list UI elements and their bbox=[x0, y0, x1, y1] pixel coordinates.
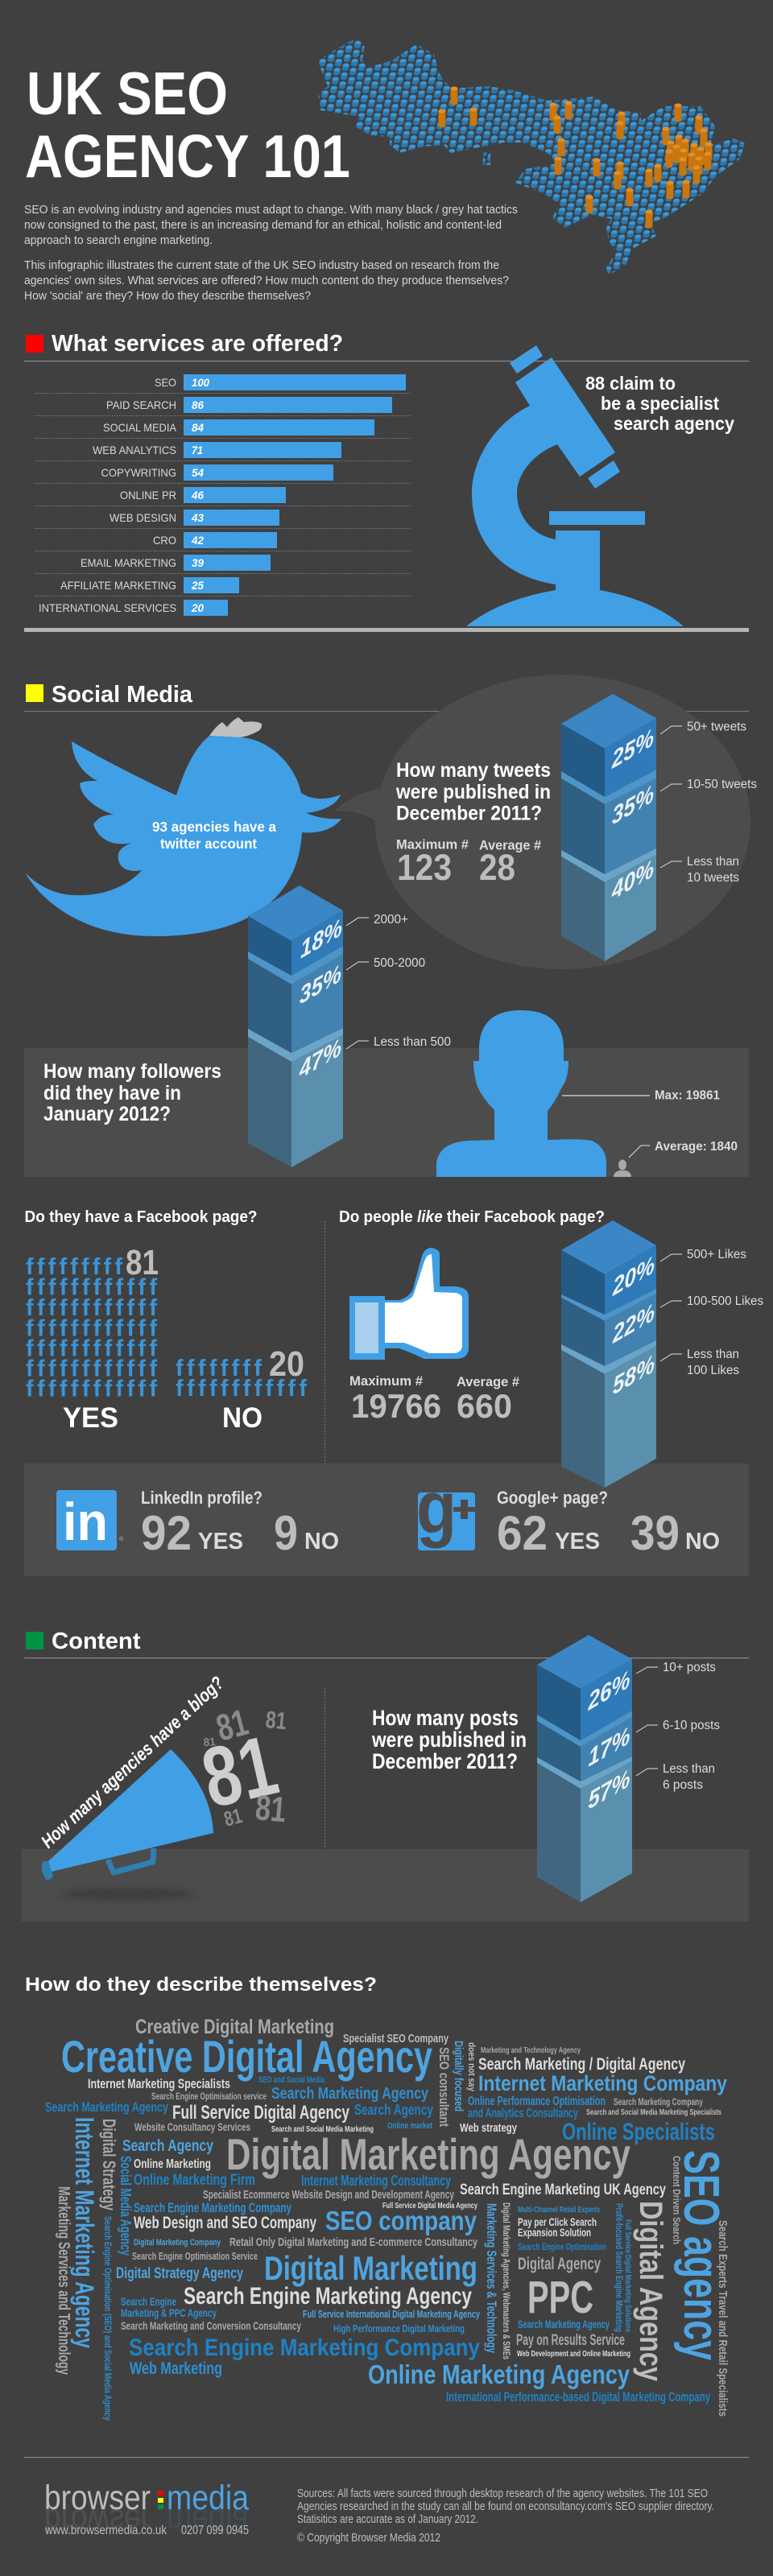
bar chart: services: 25 bbox=[191, 580, 204, 592]
word cloud: Search Marketing Agency bbox=[518, 2318, 610, 2330]
callout: 88 specialist: be a specialist bbox=[601, 393, 719, 414]
stat: linkedin profile: YES bbox=[198, 1529, 243, 1554]
word cloud: Search and Social Media Marketing bbox=[271, 2124, 374, 2134]
word cloud: Web Marketing bbox=[130, 2359, 222, 2378]
stat: linkedin profile: NO bbox=[304, 1529, 339, 1554]
word cloud: Search Engine bbox=[121, 2295, 176, 2308]
pictogram: no 20: NO bbox=[222, 1402, 262, 1434]
bar chart: services: INTERNATIONAL SERVICES bbox=[39, 601, 176, 614]
word cloud: SEO and Social Media bbox=[258, 2075, 325, 2085]
title bbox=[25, 60, 350, 190]
stats: tweets max and average bbox=[396, 837, 542, 888]
stats: likes max and average: Maximum # bbox=[349, 1373, 424, 1389]
word cloud: Digital Marketing Agency bbox=[226, 2129, 630, 2179]
sources bbox=[297, 2487, 714, 2545]
word cloud: Search Engine Optimisation (SEO) and Social Media Agency bbox=[102, 2216, 114, 2421]
icon: google plus: g bbox=[416, 1467, 457, 1549]
stacked column: posts: 57% bbox=[588, 1764, 630, 1814]
stacked column: posts: 17% bbox=[588, 1721, 630, 1772]
stats: likes max and average: 660 bbox=[457, 1387, 512, 1425]
word cloud: Search Engine Marketing Company bbox=[129, 2334, 480, 2361]
pictogram: yes 81: ffffffffffff bbox=[26, 1295, 157, 1321]
word cloud: SEO company bbox=[325, 2206, 477, 2235]
pictogram: no 20: 20 bbox=[269, 1344, 304, 1384]
word cloud: Digital Strategy Agency bbox=[116, 2265, 243, 2282]
sources: © Copyright Browser Media 2012 bbox=[297, 2532, 440, 2545]
question: tweets bbox=[395, 759, 551, 824]
word cloud: Content Driven Search bbox=[671, 2156, 683, 2244]
pictogram: no 20: ffffffffffff bbox=[176, 1376, 307, 1402]
word cloud: Pay per Click Search bbox=[518, 2215, 597, 2228]
word cloud: Online market bbox=[387, 2121, 432, 2131]
bar chart: services: EMAIL MARKETING bbox=[81, 556, 176, 569]
word cloud: Search Marketing Company bbox=[614, 2096, 703, 2107]
icon: linkedin: ® bbox=[119, 1536, 124, 1542]
stacked column: followers: 18% bbox=[300, 913, 342, 964]
logo: browser media: browser bbox=[44, 2479, 151, 2517]
pictogram: yes 81: fffffffff bbox=[26, 1254, 122, 1280]
stacked column: tweets: 25% bbox=[611, 723, 654, 774]
word cloud: Multi-Channel Retail Experts bbox=[518, 2206, 600, 2215]
word cloud: does not say bbox=[466, 2042, 477, 2091]
word cloud: Marketing and Technology Agency bbox=[481, 2046, 581, 2055]
icon: thumbs up bbox=[349, 1248, 469, 1360]
bar chart: services: SOCIAL MEDIA bbox=[103, 421, 177, 434]
stat: google plus page: 62 bbox=[497, 1506, 548, 1560]
labels: tweets column: 50+ tweets bbox=[687, 720, 746, 734]
green square marker bbox=[26, 1632, 43, 1649]
word cloud: Web Design and SEO Company bbox=[134, 2214, 316, 2232]
labels: posts column: Less than bbox=[663, 1762, 715, 1776]
labels: likes column: 500+ Likes bbox=[687, 1248, 746, 1261]
bar chart: services: AFFILIATE MARKETING bbox=[60, 579, 176, 592]
stat: google plus page: NO bbox=[685, 1529, 720, 1554]
labels: followers column bbox=[346, 913, 451, 1049]
icon: large head silhouette bbox=[436, 1010, 606, 1177]
word cloud: Full Service Digital Media Agency bbox=[382, 2201, 477, 2211]
word cloud: Creative Digital Agency bbox=[61, 2031, 432, 2082]
word cloud: SEO agency bbox=[673, 2150, 729, 2360]
contact details: www.browsermedia.co.uk bbox=[44, 2524, 167, 2537]
word cloud: Expansion Solution bbox=[518, 2226, 591, 2239]
bar chart: services: 100 bbox=[192, 377, 209, 389]
section: facebook bbox=[24, 1208, 763, 1576]
word cloud: Online Marketing Firm bbox=[134, 2172, 255, 2189]
word cloud: Search Agency bbox=[354, 2102, 433, 2118]
heading: facebook likes: Do people like their Facebook page? bbox=[339, 1208, 605, 1226]
word cloud: Search Engine Optimisation bbox=[518, 2241, 606, 2252]
word cloud: Marketing Services & Technology bbox=[484, 2203, 499, 2353]
title: UK SEO bbox=[27, 60, 228, 127]
heading: how do they describe themselves: How do they describe themselves? bbox=[25, 1974, 377, 1996]
stat: 81 blogs: 81 bbox=[194, 1718, 286, 1826]
question: tweets: How many tweets bbox=[396, 759, 551, 782]
intro text bbox=[24, 204, 518, 303]
question: followers: January 2012? bbox=[43, 1103, 171, 1125]
word cloud: Search Marketing and Conversion Consultancy bbox=[121, 2319, 301, 2332]
word cloud: Internet Marketing Company bbox=[478, 2071, 727, 2095]
pictogram: yes 81: YES bbox=[63, 1402, 118, 1434]
labels: posts column bbox=[636, 1661, 720, 1792]
speech bubble bbox=[335, 675, 750, 969]
question: tweets: were published in bbox=[395, 781, 551, 803]
word cloud: Search Engine Marketing UK Agency bbox=[460, 2182, 666, 2198]
section: social media bbox=[24, 675, 757, 1177]
labels: posts column: 6-10 posts bbox=[663, 1719, 720, 1732]
pictogram: yes 81: 81 bbox=[126, 1243, 159, 1282]
section: content bbox=[22, 1629, 749, 1922]
bar chart: services: 42 bbox=[191, 535, 204, 547]
social profiles panel bbox=[24, 1463, 749, 1576]
labels: tweets column: 10 tweets bbox=[687, 871, 739, 885]
word cloud: Digital Marketing Company bbox=[134, 2238, 221, 2248]
word cloud: Marketing Services and Technology bbox=[55, 2186, 72, 2376]
stat: 81 blogs: 81 bbox=[264, 1707, 287, 1735]
stat: google plus page: Google+ page? bbox=[497, 1488, 608, 1508]
callout: 88 specialist: search agency bbox=[614, 413, 734, 434]
bar chart: services: ONLINE PR bbox=[120, 489, 176, 502]
pictogram: yes 81: ffffffffffff bbox=[26, 1356, 157, 1381]
heading: content: Content bbox=[52, 1629, 141, 1654]
callout: 88 specialist: 88 claim to bbox=[585, 373, 676, 394]
icon: linkedin: in bbox=[63, 1492, 108, 1551]
bar chart: services: 86 bbox=[192, 399, 204, 411]
word cloud: Internet Marketing Agency bbox=[70, 2117, 99, 2348]
bar chart: services: 43 bbox=[191, 512, 204, 524]
labels: followers column: 2000+ bbox=[374, 913, 408, 927]
word cloud: Search Engine Marketing Company bbox=[134, 2200, 291, 2215]
red square marker bbox=[26, 335, 43, 353]
intro text: now consigned to the past, there is an increasing demand for an ethical, holistic and content-led bbox=[24, 219, 502, 232]
bar chart: services: 71 bbox=[192, 444, 203, 456]
stacked column: posts bbox=[537, 1635, 632, 1902]
word cloud: Online Marketing bbox=[134, 2157, 211, 2171]
intro text: agencies' own sites. What services are offered? How much content do they produce themselves? bbox=[24, 275, 509, 287]
icon: twitter bird bbox=[25, 717, 341, 936]
pictogram: yes 81: ffffffffffff bbox=[26, 1275, 157, 1301]
callout: twitter accounts: twitter account bbox=[160, 836, 257, 852]
word cloud: Full Service Digital Marketing Solutions bbox=[623, 2219, 632, 2332]
word cloud: Digital Strategy bbox=[99, 2119, 119, 2211]
heading: what services: What services are offered? bbox=[52, 331, 343, 357]
yellow square marker bbox=[26, 684, 43, 702]
icon: linkedin bbox=[56, 1490, 124, 1551]
bar chart: services: 46 bbox=[191, 489, 204, 502]
stat: max followers: Max: 19861 bbox=[655, 1088, 720, 1103]
word cloud: Digital Marketing bbox=[264, 2249, 477, 2287]
stat: linkedin profile: 92 bbox=[141, 1506, 192, 1560]
logo: browser media bbox=[44, 2479, 249, 2540]
word cloud: Search Marketing Agency bbox=[45, 2099, 168, 2115]
stacked column: followers bbox=[248, 886, 343, 1167]
word cloud: Specialist SEO Company bbox=[343, 2033, 449, 2046]
stat: google plus page bbox=[497, 1488, 720, 1560]
stat: linkedin profile: 9 bbox=[274, 1506, 298, 1560]
bar chart: services: SEO bbox=[155, 376, 176, 389]
stat: google plus page: 39 bbox=[630, 1506, 680, 1560]
icon: microscope bbox=[466, 345, 684, 626]
word cloud: Full Service International Digital Marketing Agency bbox=[303, 2308, 481, 2320]
labels: followers column: Less than 500 bbox=[374, 1035, 451, 1049]
icon: megaphone bbox=[42, 1749, 213, 1901]
pictogram: yes 81: ffffffffffff bbox=[26, 1315, 157, 1341]
question: tweets: December 2011? bbox=[396, 802, 542, 824]
section: services bbox=[24, 331, 749, 632]
pictogram: yes 81: ffffffffffff bbox=[26, 1335, 157, 1361]
callout: 88 specialist bbox=[585, 373, 734, 434]
labels: posts column: 10+ posts bbox=[663, 1661, 716, 1674]
question: followers: How many followers bbox=[43, 1060, 221, 1083]
intro text: SEO is an evolving industry and agencies must adapt to change. With many black / grey hat tactics bbox=[24, 204, 518, 217]
labels: likes column: 100 Likes bbox=[687, 1364, 739, 1377]
stacked column: likes: 58% bbox=[613, 1349, 655, 1400]
pictogram: no 20 bbox=[176, 1344, 307, 1434]
pictogram: no 20: ffffffff bbox=[176, 1356, 262, 1381]
floor panel bbox=[22, 1849, 749, 1922]
stat: average followers bbox=[614, 1140, 738, 1177]
stacked column: tweets: 40% bbox=[611, 854, 654, 906]
labels: tweets column bbox=[660, 720, 757, 885]
stat: google plus page: YES bbox=[555, 1529, 600, 1554]
word cloud: Internet Marketing Consultancy bbox=[301, 2173, 451, 2189]
stacked column: likes: 20% bbox=[612, 1250, 655, 1302]
stats: tweets max and average: Maximum # bbox=[396, 837, 469, 852]
word cloud: SEO consultant bbox=[436, 2047, 452, 2127]
word cloud: Search Engine Optimisation Service bbox=[132, 2250, 258, 2262]
stats: tweets max and average: 123 bbox=[397, 847, 452, 888]
bar chart: services: COPYWRITING bbox=[101, 466, 176, 479]
word cloud: Full Service Digital Agency bbox=[172, 2102, 349, 2124]
question: blog: How many agencies have a blog? bbox=[37, 1672, 228, 1852]
stacked column: likes: 22% bbox=[612, 1298, 655, 1349]
word cloud: Search Marketing / Digital Agency bbox=[478, 2055, 685, 2074]
word cloud: Retail Only Digital Marketing and E-commerce Consultancy bbox=[229, 2235, 477, 2249]
bar chart: services: PAID SEARCH bbox=[106, 398, 176, 411]
bar chart: services: 39 bbox=[192, 557, 204, 569]
stacked column: followers: 47% bbox=[299, 1033, 341, 1084]
stat: average followers: Average: 1840 bbox=[655, 1140, 738, 1154]
labels: tweets column: 10-50 tweets bbox=[687, 778, 757, 791]
word cloud: Online Marketing Agency bbox=[368, 2359, 630, 2389]
stats: likes max and average bbox=[349, 1373, 520, 1425]
question: followers bbox=[43, 1060, 221, 1125]
labels: likes column bbox=[660, 1248, 763, 1377]
pictogram: yes 81: ffffffffffff bbox=[26, 1377, 157, 1402]
intro text: This infographic illustrates the current state of the UK SEO industry based on research from the bbox=[24, 259, 499, 272]
word cloud: Search Engine Optimisation service bbox=[151, 2091, 267, 2102]
word cloud: Online Performance Optimisation bbox=[468, 2095, 606, 2108]
labels: likes column: Less than bbox=[687, 1348, 739, 1361]
question: posts: How many posts bbox=[372, 1706, 519, 1730]
stacked column: posts: 26% bbox=[588, 1665, 630, 1716]
labels: posts column: 6 posts bbox=[663, 1778, 703, 1792]
UK map of agencies bbox=[318, 39, 745, 275]
word cloud: Digital Agency bbox=[518, 2255, 601, 2273]
bar chart: services: 84 bbox=[192, 422, 204, 434]
bar chart: services: CRO bbox=[153, 534, 176, 547]
word cloud: High Performance Digital Marketing bbox=[333, 2322, 465, 2334]
word cloud: Creative Digital Marketing bbox=[135, 2016, 334, 2038]
word cloud: Digital Marketing Agencies, Webmasters & SMEs bbox=[501, 2202, 512, 2359]
logo: browser media: media bbox=[167, 2501, 249, 2540]
stats: tweets max and average: 28 bbox=[479, 847, 515, 888]
stat: 81 blogs: 81 bbox=[212, 1701, 252, 1749]
stacked column: likes bbox=[561, 1220, 656, 1488]
followers panel bbox=[24, 1048, 749, 1177]
logo: browser media: browser bbox=[44, 2501, 151, 2540]
labels: likes column: 100-500 Likes bbox=[687, 1294, 763, 1308]
word cloud: Digital Agency bbox=[633, 2201, 668, 2382]
word cloud: Social Media Agency bbox=[118, 2156, 134, 2256]
bar chart: services: WEB ANALYTICS bbox=[93, 444, 176, 456]
stats: tweets max and average: Average # bbox=[479, 837, 542, 853]
stacked column: tweets: 35% bbox=[612, 779, 654, 830]
callout: twitter accounts bbox=[152, 819, 276, 852]
intro text: approach to search engine marketing. bbox=[24, 234, 213, 247]
word cloud: and Analytics Consultancy bbox=[468, 2107, 578, 2120]
bar chart: services: 20 bbox=[191, 602, 204, 614]
stat: 81 blogs: 81 bbox=[254, 1788, 287, 1830]
stats: likes max and average: 19766 bbox=[351, 1387, 441, 1425]
labels: followers column: 500-2000 bbox=[374, 956, 425, 970]
stats: likes max and average: Average # bbox=[457, 1374, 520, 1389]
heading: facebook page: Do they have a Facebook page? bbox=[24, 1208, 258, 1226]
question: posts bbox=[371, 1706, 527, 1773]
bar chart: services bbox=[39, 374, 406, 616]
pictogram: yes 81 bbox=[26, 1243, 159, 1434]
word cloud: Search Engine Marketing Agency bbox=[184, 2283, 472, 2310]
word cloud: Specialist Ecommerce Website Design and Development Agency bbox=[203, 2189, 454, 2202]
word cloud bbox=[45, 2016, 730, 2421]
word cloud: Web Development and Online Marketing bbox=[517, 2350, 630, 2359]
word cloud: Search and Social Media Marketing Specialists bbox=[586, 2108, 721, 2117]
labels: tweets column: Less than bbox=[687, 855, 739, 869]
word cloud: Profit-focused Search Engine Marketing bbox=[614, 2203, 625, 2332]
intro text: How 'social' are they? How do they describe themselves? bbox=[24, 290, 311, 303]
word cloud: Marketing & PPC Agency bbox=[121, 2306, 217, 2319]
stacked column: tweets bbox=[561, 694, 656, 961]
word cloud: Search Experts Travel and Retail Specialists bbox=[716, 2220, 730, 2417]
heading: social media: Social Media bbox=[52, 682, 193, 708]
question: followers: did they have in bbox=[43, 1082, 181, 1104]
title: AGENCY 101 bbox=[25, 122, 350, 190]
stat: linkedin profile bbox=[141, 1488, 339, 1560]
logo: browser media: media bbox=[167, 2479, 249, 2517]
question: posts: were published in bbox=[371, 1728, 527, 1752]
word cloud: Pay on Results Service bbox=[516, 2332, 625, 2349]
stat: 81 blogs: 81 bbox=[221, 1803, 245, 1831]
word cloud: Online Specialists bbox=[562, 2119, 715, 2145]
bar chart: services: WEB DESIGN bbox=[110, 511, 176, 524]
callout: twitter accounts: 93 agencies have a bbox=[152, 819, 276, 835]
stat: 81 blogs: 81 bbox=[203, 1735, 216, 1748]
contact details: 0207 099 0945 bbox=[181, 2524, 249, 2537]
word cloud: PPC bbox=[527, 2272, 593, 2323]
word cloud: Digitally focused bbox=[452, 2041, 465, 2112]
sources: Statisitics are accurate as of January 2012. bbox=[297, 2513, 478, 2526]
word cloud: Search Agency bbox=[122, 2137, 214, 2155]
stacked column: followers: 35% bbox=[300, 959, 341, 1009]
word cloud: Internet Marketing Specialists bbox=[88, 2076, 230, 2091]
word cloud: Web strategy bbox=[460, 2121, 517, 2135]
word cloud: Search Marketing Agency bbox=[271, 2085, 429, 2103]
bar chart: services: 54 bbox=[192, 467, 204, 479]
question: posts: December 2011? bbox=[372, 1749, 518, 1773]
stat: linkedin profile: LinkedIn profile? bbox=[141, 1488, 262, 1508]
word cloud: Website Consultancy Services bbox=[134, 2121, 250, 2133]
